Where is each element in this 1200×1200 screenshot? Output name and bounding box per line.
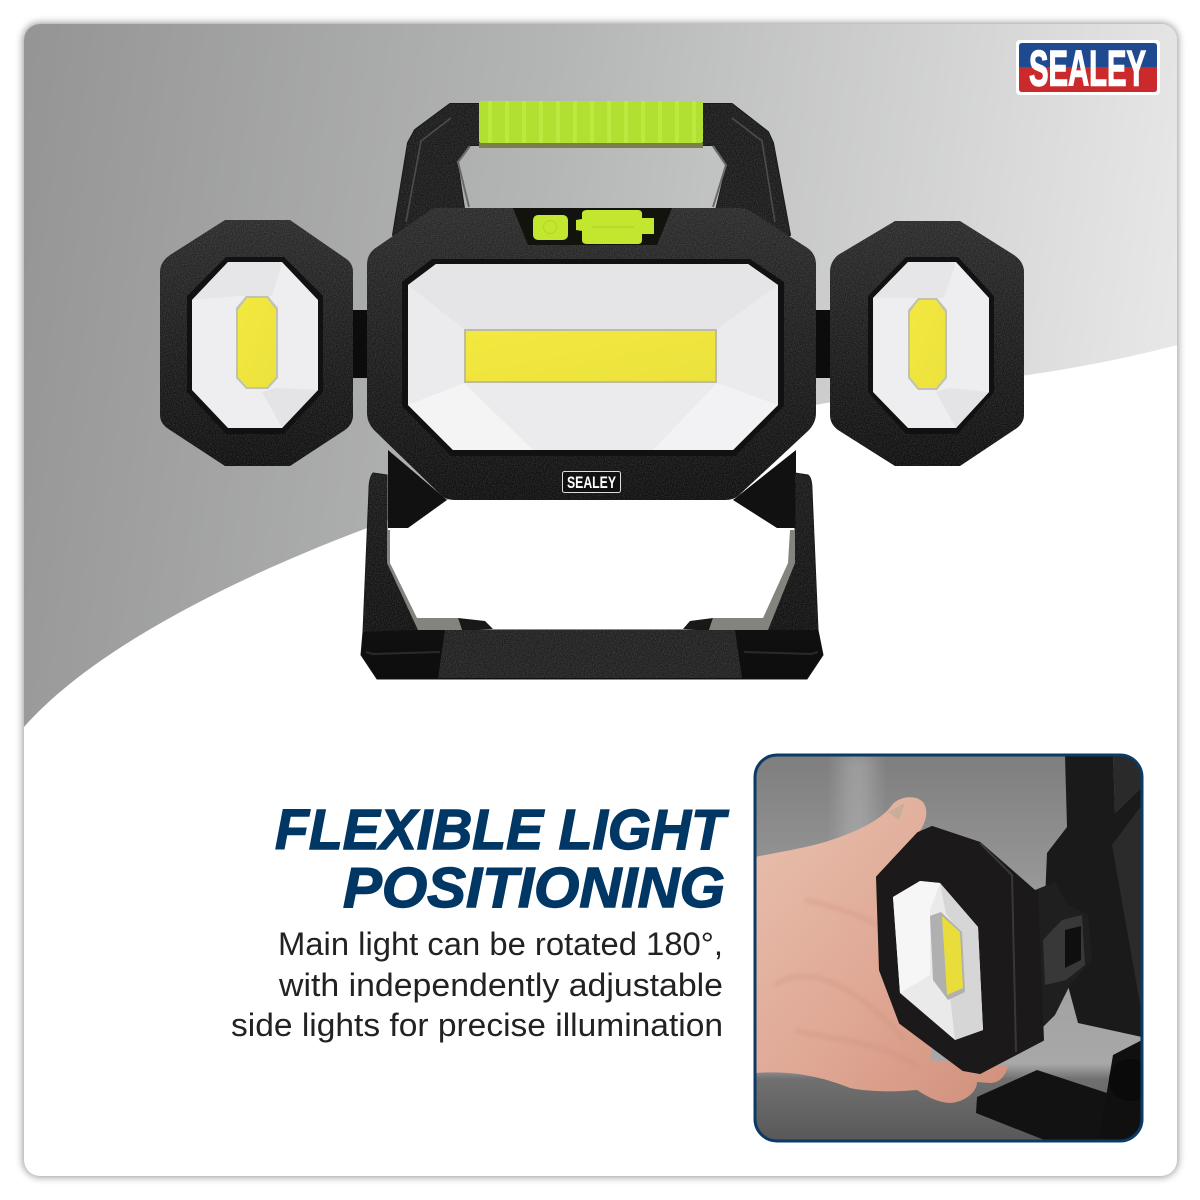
green grip with ribs [479, 101, 703, 148]
grey curved background [24, 24, 1177, 727]
photo hand [755, 797, 1008, 1103]
body text: with independently adjustable [278, 967, 723, 1003]
heading: POSITIONING [343, 856, 725, 920]
product: work light [160, 101, 1024, 679]
photo stand leg [1103, 1040, 1140, 1140]
control recess [513, 208, 672, 245]
housing logo badge [562, 472, 620, 492]
usb cover [576, 210, 654, 244]
body text: Main light can be rotated 180°, [278, 926, 723, 962]
heading [275, 798, 729, 920]
power button [533, 215, 568, 240]
right connector [813, 310, 833, 378]
photo main unit [1045, 755, 1142, 1037]
body text: side lights for precise illumination [231, 1007, 723, 1043]
stand [361, 450, 823, 679]
heading: FLEXIBLE LIGHT [275, 798, 729, 862]
photo border [755, 755, 1142, 1141]
main led strip [466, 331, 715, 381]
left side light [160, 220, 353, 466]
photo: hand adjusting side light [755, 750, 1151, 1145]
photo base of light [976, 1070, 1107, 1145]
photo swivel [1035, 886, 1068, 1026]
left connector [350, 310, 370, 378]
handle frame [393, 104, 790, 235]
housing logo badge: SEALEY [567, 473, 616, 492]
photo side light [877, 827, 1043, 1073]
right side light [830, 221, 1024, 466]
main light housing [367, 208, 816, 500]
body text [231, 926, 723, 1043]
main light reflector panel [408, 264, 778, 450]
